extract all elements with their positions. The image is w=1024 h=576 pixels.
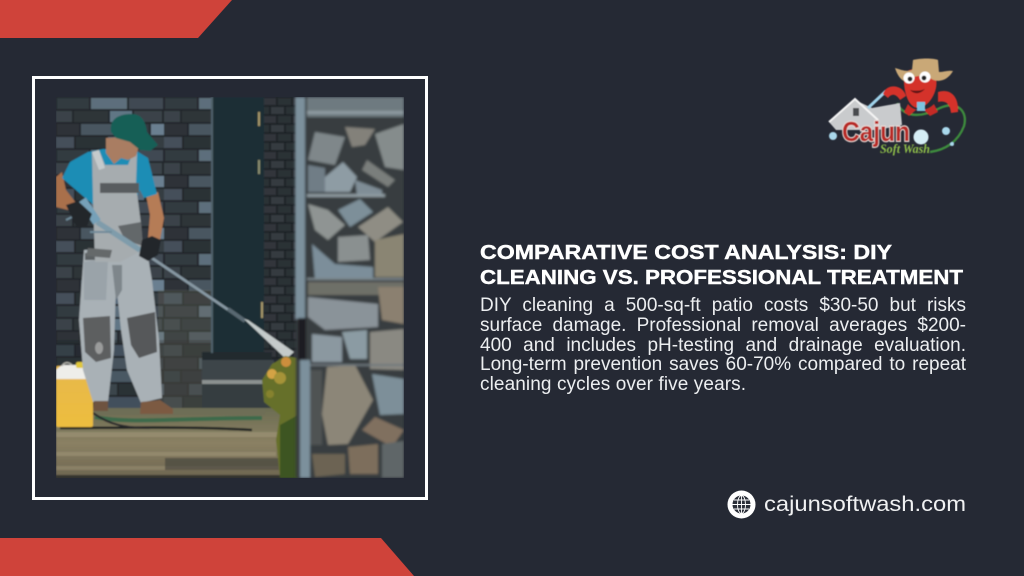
- logo: house: [829, 99, 902, 130]
- neck and face: [106, 137, 139, 164]
- worker trouser legs: [79, 245, 162, 403]
- body text block: 400 and includes pH-testing and drainage evaluation.: [480, 335, 966, 356]
- white photo frame: [34, 78, 426, 498]
- body text block: surface damage. Professional removal averages $200-: [480, 315, 966, 336]
- green and black hoses: [60, 413, 262, 430]
- logo: Soft Wash wordmark: Soft Wash: [880, 141, 930, 156]
- teal shirt: [62, 149, 157, 210]
- worker left arm: [56, 172, 76, 210]
- heading: COMPARATIVE COST ANALYSIS: DIY: [480, 241, 892, 264]
- yellow chemical jug: [56, 362, 93, 427]
- body text block: cleaning cycles over five years.: [480, 374, 746, 395]
- logo: green hose: [897, 103, 965, 152]
- worker right arm: [146, 192, 164, 240]
- photo: worker pressure washing a patio: [56, 97, 404, 478]
- brick wall: [56, 97, 212, 411]
- heading: CLEANING VS. PROFESSIONAL TREATMENT: [480, 266, 964, 289]
- work boots: [93, 400, 173, 414]
- website url: cajunsoftwash.com: [764, 493, 966, 516]
- bottom red banner: [0, 538, 414, 576]
- top red banner: [0, 0, 232, 38]
- pressure wand: [66, 200, 245, 321]
- body text block: Long-term prevention saves 60-70% compared to repeat: [480, 354, 966, 375]
- heading: [480, 241, 964, 289]
- overall bib: [86, 150, 143, 262]
- green cap: [111, 114, 158, 151]
- logo: Cajun wordmark: Cajun: [842, 116, 910, 147]
- patio ground: [56, 408, 296, 478]
- shrub: [262, 356, 298, 478]
- logo: bubbles: [829, 127, 954, 146]
- water spray: [244, 319, 294, 359]
- body text block: [480, 295, 966, 395]
- dark door: [212, 97, 264, 355]
- globe icon: [728, 490, 756, 518]
- narrow dark brick column: [264, 97, 298, 359]
- black gloves: [66, 201, 161, 261]
- gabion stone wall: [295, 97, 404, 478]
- company logo: [829, 58, 965, 156]
- entry steps: [202, 97, 274, 408]
- body text block: DIY cleaning a 500-sq-ft patio costs $30-50 but risks: [480, 295, 966, 316]
- logo: water spray: [868, 91, 886, 108]
- logo: crawfish mascot: [883, 58, 958, 116]
